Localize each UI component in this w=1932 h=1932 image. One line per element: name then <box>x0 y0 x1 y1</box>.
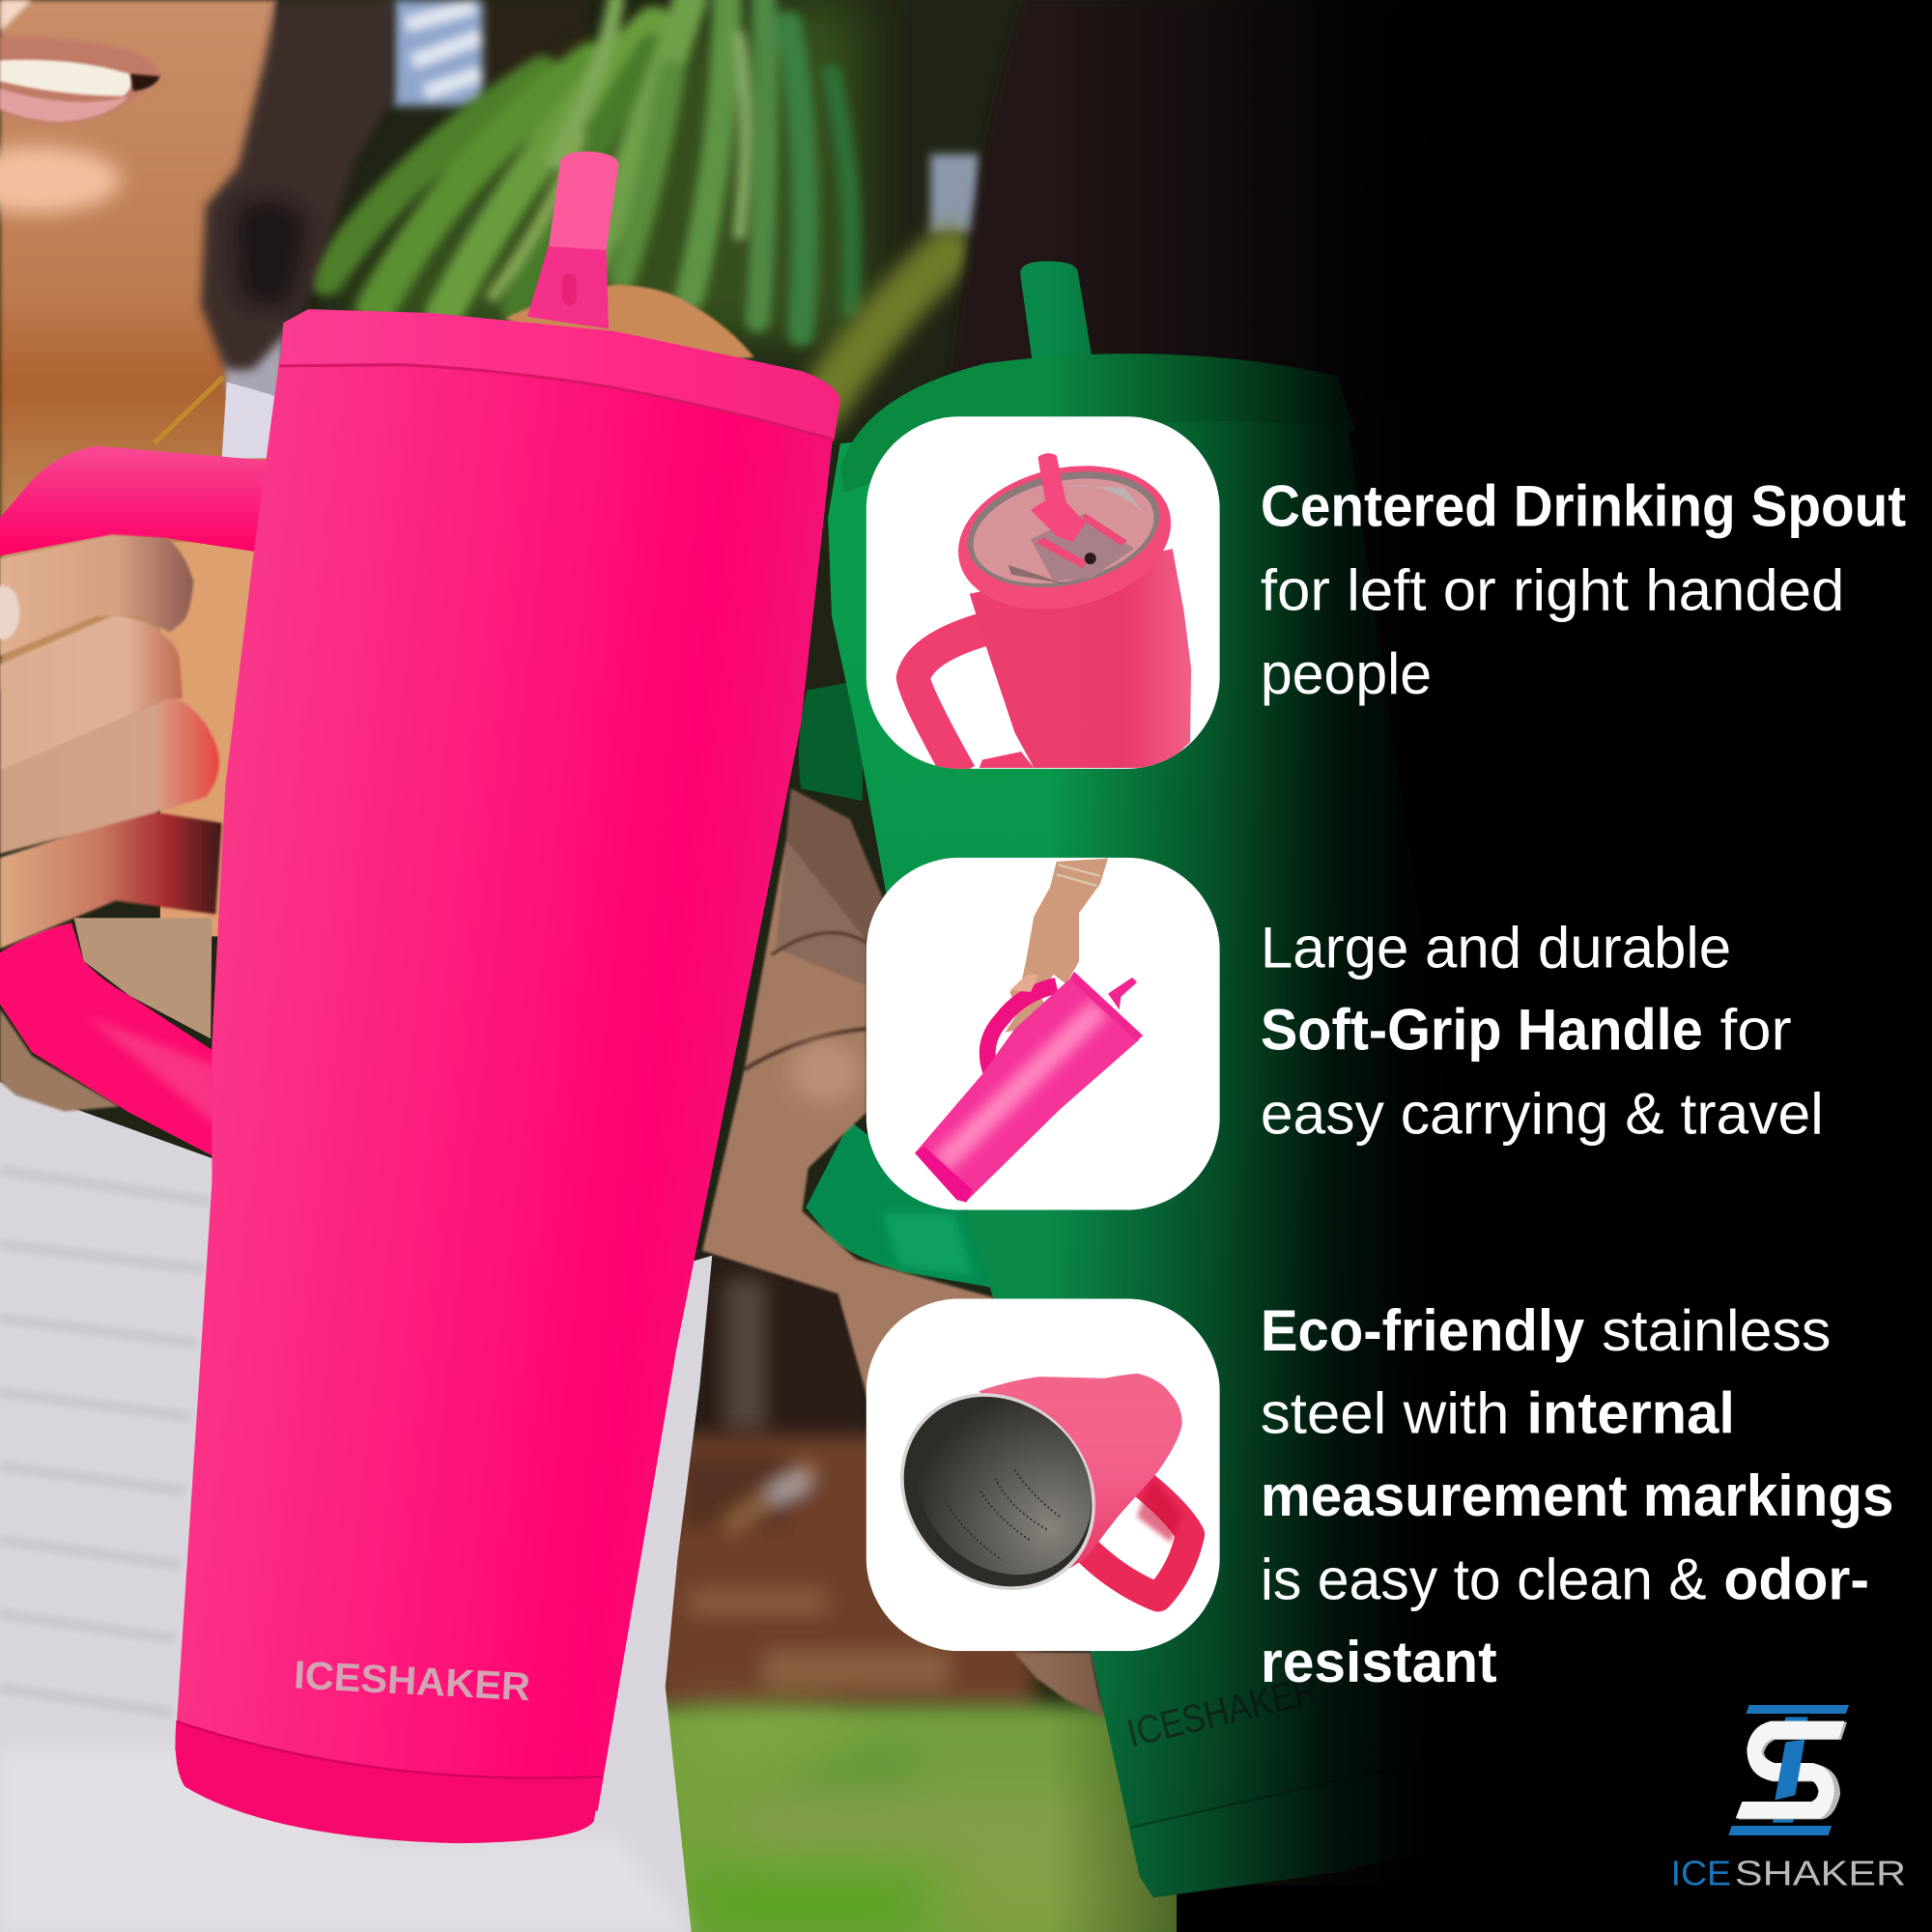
green base <box>1131 1740 1555 1897</box>
arm and hand <box>1005 859 1108 1033</box>
text: centered drinking spout: Centered Drinking Spout <box>1261 474 1906 539</box>
text: soft-grip handle: Soft-Grip Handle <box>1261 998 1703 1063</box>
shoulder <box>505 285 754 370</box>
text: eco-friendly: stainless <box>1602 1298 1831 1363</box>
text: eco-friendly <box>1261 1298 1893 1694</box>
tumbler lid <box>1069 972 1143 1041</box>
cup body <box>980 1374 1182 1568</box>
spout clip <box>1031 513 1134 581</box>
green lid <box>840 354 1355 493</box>
pink upper handle <box>0 446 273 555</box>
tumbler logo pink: ICESHAKER <box>293 1652 531 1709</box>
text: centered drinking spout: for left or right handed <box>1261 557 1844 622</box>
card: centered drinking spout <box>867 416 1220 775</box>
mug body <box>970 549 1191 768</box>
left palm below handle <box>74 918 212 1038</box>
text: eco-friendly: steel with <box>1261 1380 1509 1445</box>
card: soft-grip handle <box>867 858 1220 1210</box>
text: soft-grip handle: easy carrying & travel <box>1261 1081 1824 1146</box>
mug handle <box>913 626 995 775</box>
shirt neckline <box>222 303 283 458</box>
text: eco-friendly: resistant <box>1261 1630 1497 1694</box>
skin behind the handle <box>160 542 259 936</box>
brand logo <box>1671 1705 1906 1893</box>
text: eco-friendly: Eco-friendly <box>1261 1298 1585 1363</box>
pink base <box>176 1721 601 1843</box>
olive leaf <box>819 252 949 407</box>
logo mark <box>1728 1705 1849 1835</box>
card: eco-friendly steel <box>860 1298 1220 1651</box>
pink tumbler <box>0 152 840 1843</box>
text: centered drinking spout <box>1261 474 1906 706</box>
palm leaves <box>327 0 851 332</box>
sky patch <box>393 0 483 106</box>
right forearm <box>1014 1652 1103 1717</box>
pink lid <box>280 309 840 440</box>
pink straw <box>527 152 618 329</box>
text: eco-friendly: measurement markings <box>1261 1463 1893 1528</box>
right hand <box>702 788 993 1479</box>
green straw <box>1020 261 1093 363</box>
lips <box>0 36 160 124</box>
mug rim <box>958 466 1171 609</box>
text: eco-friendly: odor- <box>1723 1548 1869 1612</box>
tumbler logo green: ICESHAKER <box>1122 1667 1322 1755</box>
pink lower handle <box>0 923 219 1159</box>
pink body <box>175 357 835 1811</box>
text: soft-grip handle: for <box>1720 998 1792 1063</box>
palm base foliage <box>345 0 863 345</box>
black clothing <box>1177 1886 1932 1932</box>
cup rim <box>900 1393 1095 1590</box>
tumbler handle <box>987 985 1057 1071</box>
text: eco-friendly: internal <box>1526 1380 1735 1445</box>
logo wordmark <box>1671 1855 1906 1893</box>
cup interior <box>904 1397 1092 1586</box>
logo wordmark: SHAKER <box>1735 1855 1906 1893</box>
green tumbler <box>799 261 1555 1897</box>
text: soft-grip handle: Large and durable <box>1261 915 1731 980</box>
grass <box>640 1707 1195 1932</box>
hair <box>201 0 393 370</box>
text: eco-friendly: is easy to clean & <box>1261 1548 1707 1612</box>
mug opening <box>968 471 1159 587</box>
necklace <box>154 377 223 443</box>
nose highlight <box>0 0 32 32</box>
mug straw <box>1031 453 1086 542</box>
text: soft-grip handle <box>1261 915 1824 1146</box>
dark gradient overlay <box>1047 0 1454 1932</box>
tree trunk <box>690 1256 868 1446</box>
shirt <box>0 1082 712 1932</box>
cup handle <box>1086 1485 1190 1597</box>
text: centered drinking spout: people <box>1261 641 1432 706</box>
teeth <box>0 60 131 96</box>
logo wordmark: ICE <box>1671 1855 1731 1893</box>
left hand fingers <box>0 535 222 949</box>
thumb nail <box>0 585 19 639</box>
second person hair <box>949 0 1466 407</box>
tumbler base <box>915 1147 973 1203</box>
tumbler body <box>915 980 1139 1202</box>
measurement marks <box>944 1470 1060 1560</box>
chin highlight <box>0 147 121 213</box>
tumbler straw <box>1108 978 1137 1009</box>
green handle upper <box>799 680 863 801</box>
hand beneath lower handle <box>0 1009 120 1112</box>
ground <box>653 1435 1035 1713</box>
green body <box>828 394 1552 1897</box>
green handle lower <box>806 1122 992 1288</box>
woman left: face and neck <box>0 0 754 936</box>
